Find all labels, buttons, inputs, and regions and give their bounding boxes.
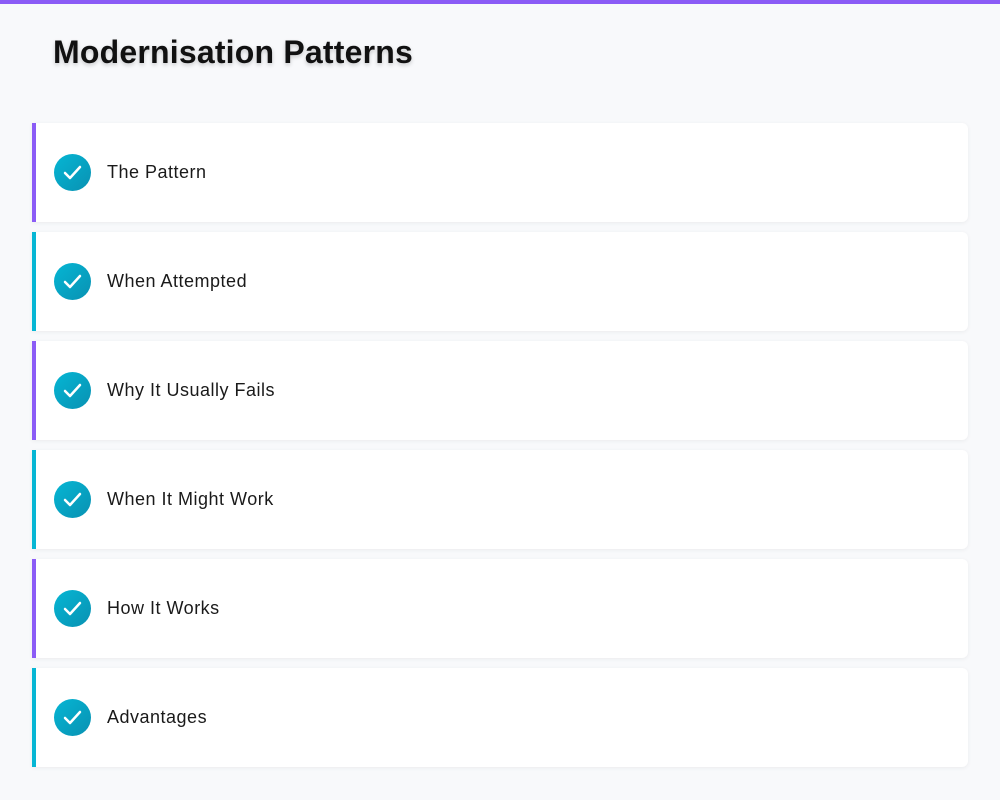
title: Modernisation Patterns [53,34,413,70]
card: Why It Usually Fails: Why It Usually Fails [107,380,275,400]
card: Advantages [32,668,968,767]
card: How It Works [32,559,968,658]
card: How It Works: How It Works [107,598,220,618]
card: When It Might Work [32,450,968,549]
card: The Pattern: The Pattern [107,162,207,182]
card: Why It Usually Fails [32,341,968,440]
card: When Attempted [32,232,968,331]
card: The Pattern [32,123,968,222]
card: When It Might Work: When It Might Work [107,489,274,509]
card: Advantages: Advantages [107,707,207,727]
card: When Attempted: When Attempted [107,271,247,291]
